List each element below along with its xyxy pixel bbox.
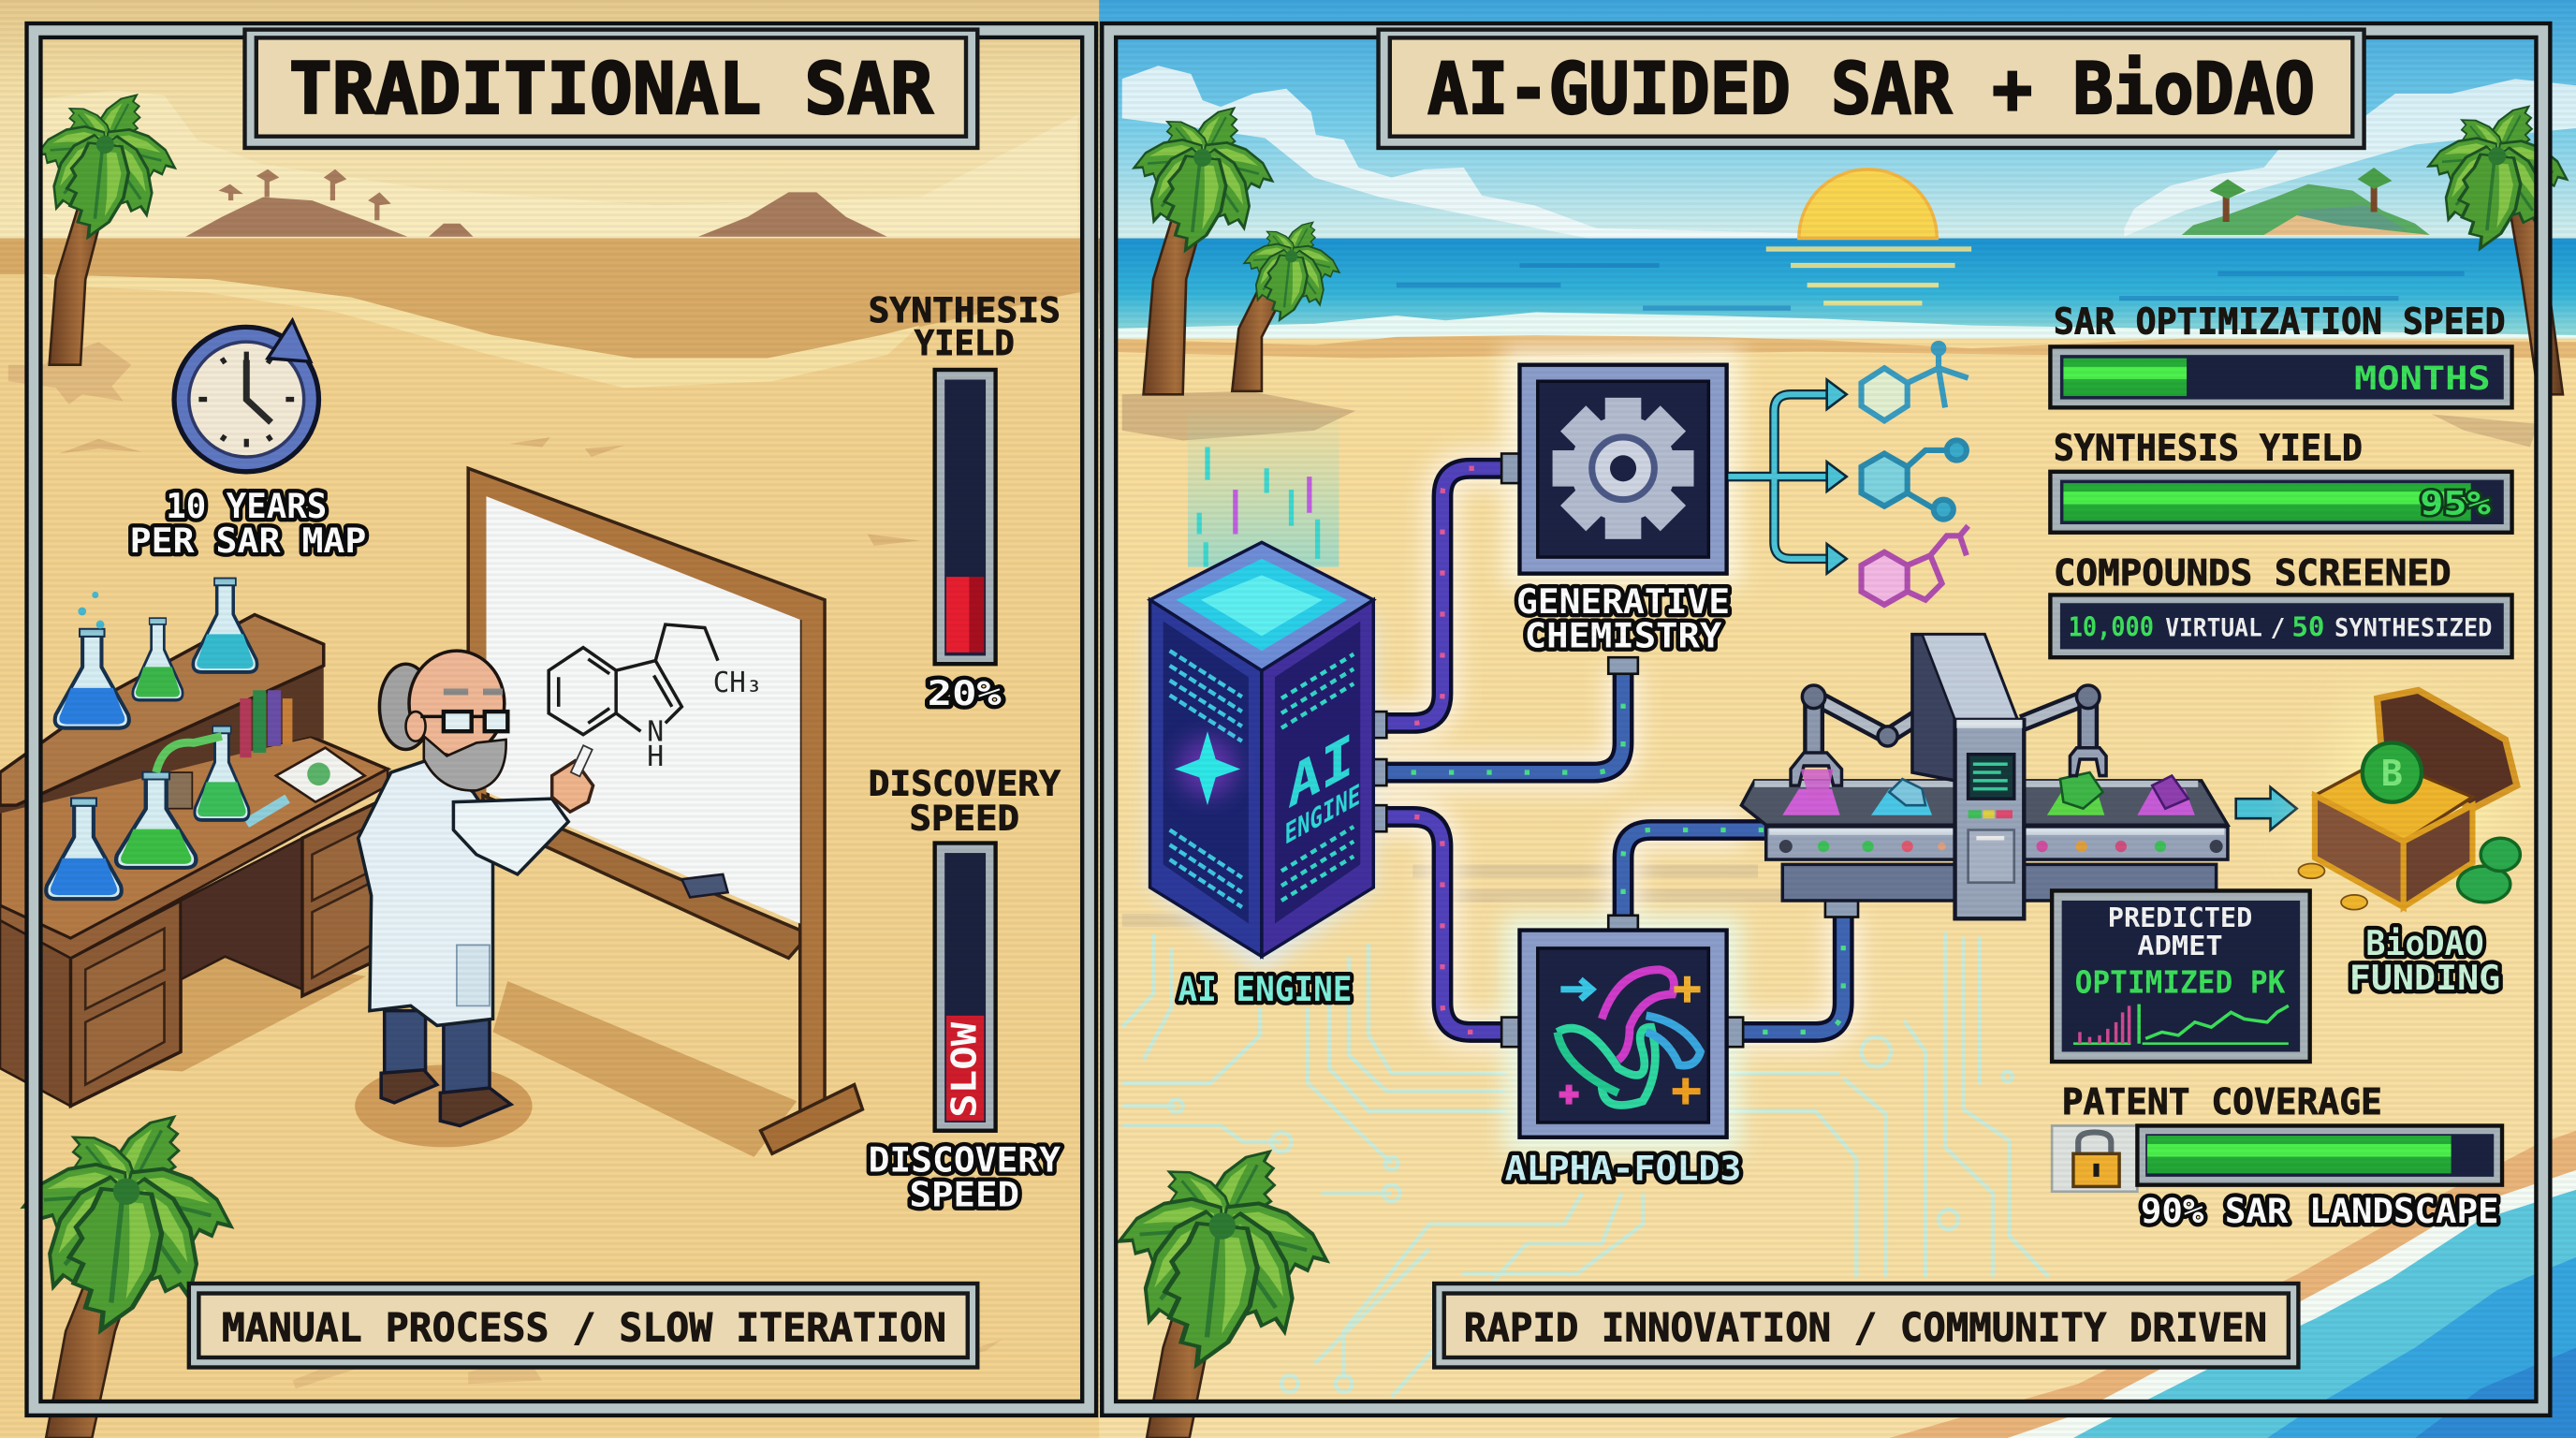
stat: compounds screened: VIRTUAL xyxy=(2165,614,2262,642)
treasure chest xyxy=(2298,687,2520,910)
panel: predicted ADMET: ADMET xyxy=(2137,931,2223,961)
stat: SAR optimization speed xyxy=(2050,301,2512,407)
stat: compounds screened: / xyxy=(2271,614,2285,642)
flasks xyxy=(46,579,257,899)
palm tree: right panel, large left xyxy=(1133,98,1279,394)
stat: SAR optimization speed: SAR OPTIMIZATION SPEED xyxy=(2054,301,2506,343)
scientist xyxy=(359,651,593,1125)
AI engine server: AI xyxy=(1288,722,1354,823)
title: AI-guided SAR + BioDAO xyxy=(1379,30,2364,148)
alpha-fold3 module xyxy=(1519,931,1727,1137)
indole molecule sketch: N xyxy=(647,716,664,749)
indole molecule sketch: H xyxy=(647,741,664,773)
footer: manual process xyxy=(189,1284,977,1368)
generative chemistry module xyxy=(1519,365,1727,574)
stat: compounds screened: 50 xyxy=(2291,611,2324,642)
meter: discovery speed (traditional): SLOW xyxy=(944,1021,985,1118)
whiteboard xyxy=(468,468,862,1153)
label: alpha-fold3: ALPHA-FOLD3 xyxy=(1505,1148,1741,1188)
island xyxy=(2182,168,2430,235)
meter: discovery speed (traditional): DISCOVERY xyxy=(869,1140,1061,1181)
AI engine server: ENGINE xyxy=(1284,777,1360,852)
background: tropical beach scene xyxy=(1099,0,2576,1438)
palm tree: right panel, small left xyxy=(1232,215,1343,391)
palm tree: right panel, bottom xyxy=(1117,1137,1337,1438)
glow behind pipeline xyxy=(1150,348,1843,1155)
label: BioDAO funding xyxy=(2349,923,2500,998)
treasure chest: B xyxy=(2381,753,2403,795)
title: traditional SAR xyxy=(245,30,977,148)
stat: compounds screened xyxy=(2050,552,2512,657)
indole molecule sketch: CH₃ xyxy=(713,667,762,699)
stat: patent coverage: 90% SAR LANDSCAPE xyxy=(2141,1191,2499,1231)
panel: predicted ADMET xyxy=(2052,890,2310,1062)
clock caption xyxy=(130,486,366,561)
meter: synthesis yield (traditional): YIELD xyxy=(915,323,1015,363)
palm tree: left panel bottom xyxy=(21,1102,241,1438)
distant hills: desert xyxy=(185,169,887,237)
label: BioDAO funding: BioDAO xyxy=(2365,923,2484,963)
ground shadows xyxy=(131,957,797,1157)
meter: synthesis yield (traditional) xyxy=(869,290,1061,713)
stat: compounds screened: SYNTHESIZED xyxy=(2334,614,2492,642)
meter: synthesis yield (traditional): 20% xyxy=(928,673,1002,713)
background: desert scene xyxy=(0,0,1099,1438)
conveyor machine xyxy=(1741,635,2228,918)
clock caption: PER SAR MAP xyxy=(130,521,366,561)
panel: predicted ADMET: PREDICTED xyxy=(2108,902,2252,933)
label: BioDAO funding: FUNDING xyxy=(2349,958,2500,998)
stat: patent coverage xyxy=(2052,1081,2502,1231)
arrow to treasure chest xyxy=(2236,787,2297,829)
palm tree: left panel top xyxy=(35,85,181,365)
clock icon: 10 years xyxy=(174,320,318,472)
stat: compounds screened: COMPOUNDS SCREENED xyxy=(2054,552,2452,594)
branching arrows to molecules xyxy=(1728,380,1847,574)
meter: discovery speed (traditional): SPEED xyxy=(909,798,1019,838)
stat: synthesis yield: 95% xyxy=(2420,484,2491,522)
label: AI engine: AI ENGINE xyxy=(1178,969,1352,1009)
label: generative chemistry: CHEMISTRY xyxy=(1525,616,1722,656)
title: AI-guided SAR + BioDAO: AI-GUIDED SAR + BioDAO xyxy=(1427,48,2315,130)
footer: manual process: MANUAL PROCESS / SLOW ITERATION xyxy=(222,1304,946,1350)
stat: SAR optimization speed: MONTHS xyxy=(2354,360,2491,398)
label: generative chemistry xyxy=(1516,581,1730,656)
sun xyxy=(1766,169,1971,306)
panel: traditional SAR frame xyxy=(34,30,1090,1408)
data beam above server xyxy=(1188,411,1339,567)
meter: synthesis yield (traditional): SYNTHESIS xyxy=(869,290,1061,330)
pipelines xyxy=(1373,453,1858,1047)
circuit traces xyxy=(1122,932,2049,1397)
panel: AI-guided SAR frame xyxy=(1109,30,2543,1408)
molecules xyxy=(1862,344,1969,605)
label: generative chemistry: GENERATIVE xyxy=(1516,581,1730,622)
indole molecule sketch xyxy=(549,624,762,773)
lab desk with shelf xyxy=(0,615,388,1106)
title: traditional SAR: TRADITIONAL SAR xyxy=(289,48,933,130)
stat: synthesis yield xyxy=(2050,428,2512,533)
footer: rapid innovation xyxy=(1434,1284,2298,1368)
stat: compounds screened: 10,000 xyxy=(2069,611,2154,642)
panel: predicted ADMET: OPTIMIZED PK xyxy=(2075,963,2285,1000)
stat: patent coverage: PATENT COVERAGE xyxy=(2062,1081,2382,1123)
meter: discovery speed (traditional): SPEED xyxy=(909,1174,1019,1214)
footer: rapid innovation: RAPID INNOVATION / COMMUNITY DRIVEN xyxy=(1464,1304,2267,1350)
stat: synthesis yield: SYNTHESIS YIELD xyxy=(2054,428,2363,470)
meter: discovery speed (traditional): DISCOVERY xyxy=(869,764,1061,804)
AI engine server xyxy=(1150,542,1373,957)
meter: discovery speed (traditional) xyxy=(869,764,1061,1214)
clock caption: 10 YEARS xyxy=(166,486,327,526)
palm tree: right panel, right side xyxy=(2427,96,2573,394)
